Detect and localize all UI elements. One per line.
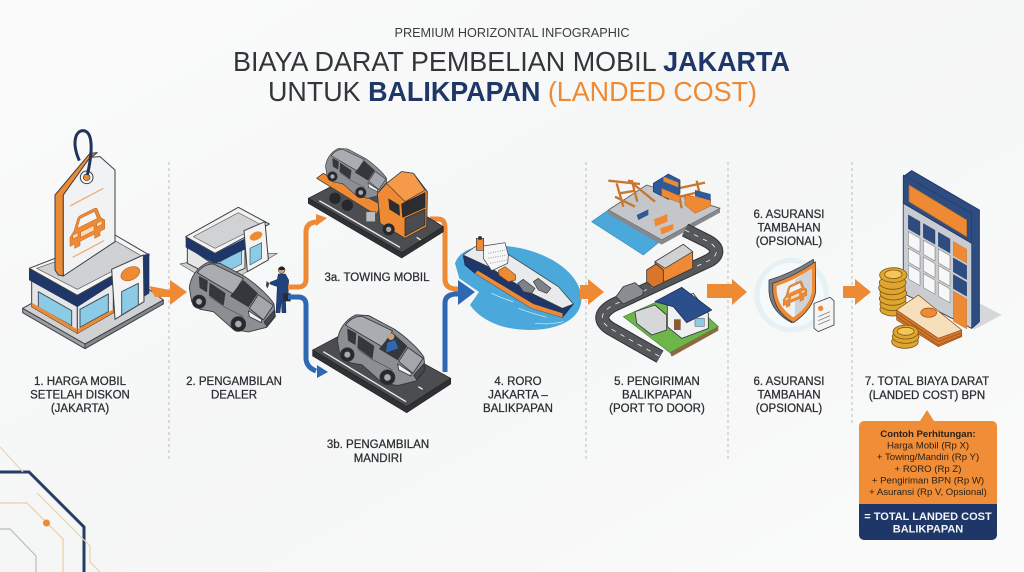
icon: port to door road <box>592 174 720 357</box>
icon: store with price tag <box>23 131 163 349</box>
arrow: step 5 to 6 <box>707 279 747 305</box>
label 4: BALIKPAPAN <box>483 403 553 415</box>
calculation text: + Pengiriman BPN (Rp W) <box>872 475 984 486</box>
total text: BALIKPAPAN <box>893 524 963 536</box>
icon: tow truck on road <box>308 148 443 258</box>
label 1: (JAKARTA) <box>51 403 109 415</box>
label 3a: 3a. TOWING MOBIL <box>324 272 430 284</box>
label 5: BALIKPAPAN <box>622 390 692 402</box>
connector: orange route to towing <box>288 222 316 287</box>
label 7: 7. TOTAL BIAYA DARAT <box>865 376 989 388</box>
step divider lines <box>169 162 852 460</box>
calculation text: + Asuransi (Rp V, Opsional) <box>869 487 987 498</box>
total text: = TOTAL LANDED COST <box>864 511 992 523</box>
truck <box>647 244 693 287</box>
calculation text: + RORO (Rp Z) <box>895 464 961 475</box>
calculation text: + Towing/Mandiri (Rp Y) <box>877 452 979 463</box>
label 6 bottom: (OPSIONAL) <box>756 403 822 415</box>
panel: calculation example <box>859 410 997 540</box>
label 6 top: 6. ASURANSI <box>754 209 824 221</box>
eyebrow: PREMIUM HORIZONTAL INFOGRAPHIC <box>394 26 630 40</box>
label 6 top: (OPSIONAL) <box>756 236 822 248</box>
arrow: step 4 to 5 <box>580 279 604 305</box>
icon: person with key <box>266 266 291 313</box>
label 5: 5. PENGIRIMAN <box>614 376 700 388</box>
label 1: SETELAH DISKON <box>30 390 130 402</box>
car on road <box>616 283 643 304</box>
title block <box>233 26 790 107</box>
icon: insurance shield and document <box>754 258 834 332</box>
title line 2: UNTUK BALIKPAPAN (LANDED COST) <box>268 76 757 107</box>
label 2: 2. PENGAMBILAN <box>186 376 282 388</box>
label 6 top: TAMBAHAN <box>757 222 821 234</box>
label 3b: 3b. PENGAMBILAN <box>327 439 429 451</box>
label 1: 1. HARGA MOBIL <box>34 376 127 388</box>
corner circuit decoration <box>0 447 100 572</box>
label 4: JAKARTA – <box>488 390 548 402</box>
title line 1: BIAYA DARAT PEMBELIAN MOBIL JAKARTA <box>233 46 790 77</box>
connector: towing to RORO <box>430 219 461 289</box>
label 4: 4. RORO <box>494 376 542 388</box>
label 5: (PORT TO DOOR) <box>609 403 705 415</box>
arrow: step 6 to 7 <box>843 279 871 305</box>
cash bundle <box>897 295 962 347</box>
arrow: step 1 to 2 <box>149 280 187 305</box>
connector: self-pickup to RORO <box>445 294 461 372</box>
connector: blue route to self-pickup <box>288 297 316 371</box>
connector arrowhead: towing <box>316 214 327 226</box>
label 2: DEALER <box>211 390 257 402</box>
calculation text: Harga Mobil (Rp X) <box>887 441 969 452</box>
connector arrowhead: self-pickup <box>317 365 328 378</box>
calculation text: Contoh Perhitungan: <box>880 429 976 440</box>
icon: self-drive car on road <box>313 315 451 413</box>
coin stack <box>879 268 907 316</box>
label 3b: MANDIRI <box>354 453 402 465</box>
arrowhead: into RORO <box>458 280 475 305</box>
label 7: (LANDED COST) BPN <box>869 390 985 402</box>
icon: RORO ship on water <box>455 236 581 330</box>
small coins <box>892 325 919 348</box>
total band <box>859 504 997 540</box>
icon: calculator with coins and cash <box>879 171 1002 348</box>
icon: dealer and car handover <box>180 207 291 332</box>
label 6 bottom: 6. ASURANSI <box>754 376 824 388</box>
label 6 bottom: TAMBAHAN <box>757 390 821 402</box>
